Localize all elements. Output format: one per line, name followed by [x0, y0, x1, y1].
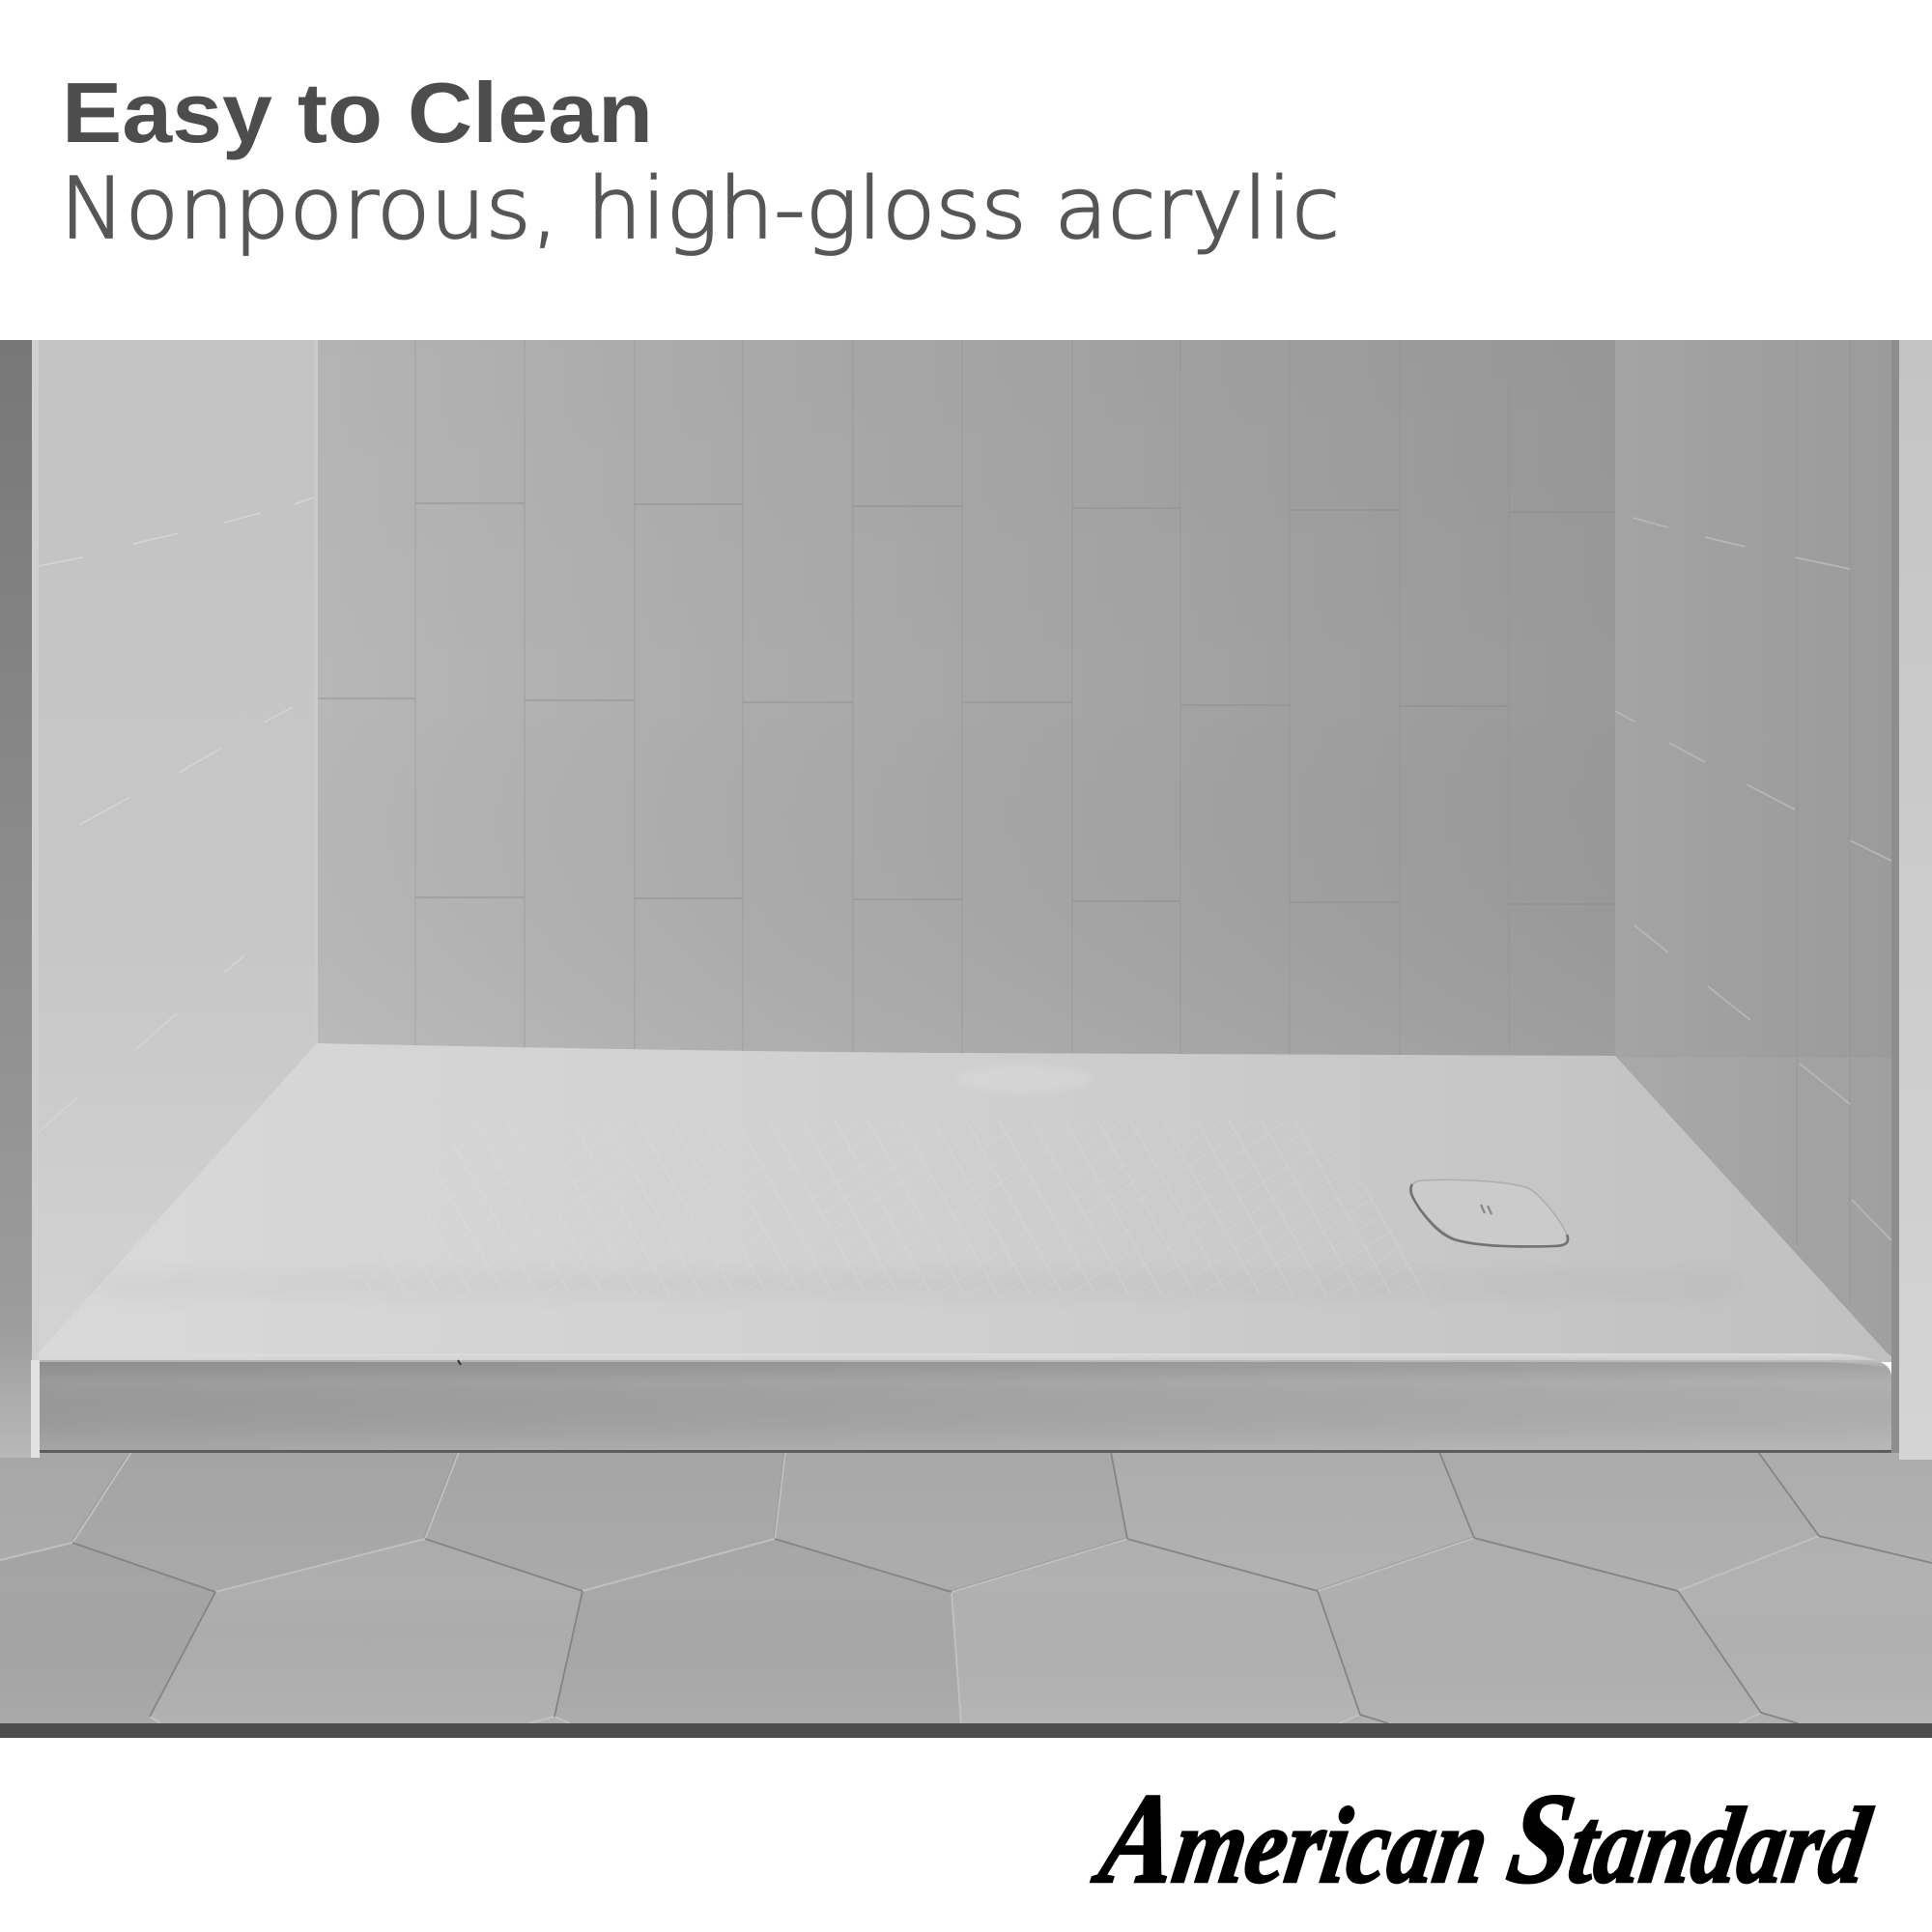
front lip of shower pan: [40, 1353, 1891, 1451]
right door frame: [1891, 340, 1932, 1460]
shower pan surface: [39, 1043, 1898, 1362]
left door frame: [0, 340, 40, 1458]
hexagonal floor tiles: [0, 1451, 1932, 1723]
photo: shower base in tiled alcove: [0, 340, 1932, 1723]
logo: American Standard: American Standard: [1086, 1768, 1881, 1911]
back wall with tile joints: [318, 340, 1615, 1060]
dark divider band: [0, 1723, 1932, 1738]
herringbone slip-resistant texture: [357, 1121, 1449, 1294]
heading: [60, 65, 1340, 258]
title: Easy to Clean: Easy to Clean: [62, 65, 653, 160]
left side wall: [39, 340, 318, 1360]
subtitle: Nonporous, high-gloss acrylic: Nonporous, high-gloss acrylic: [60, 159, 1340, 258]
right side wall: [1615, 340, 1895, 1360]
shadow line under shower pan: [40, 1450, 1894, 1453]
icon: square drain cover: [1410, 1179, 1568, 1246]
